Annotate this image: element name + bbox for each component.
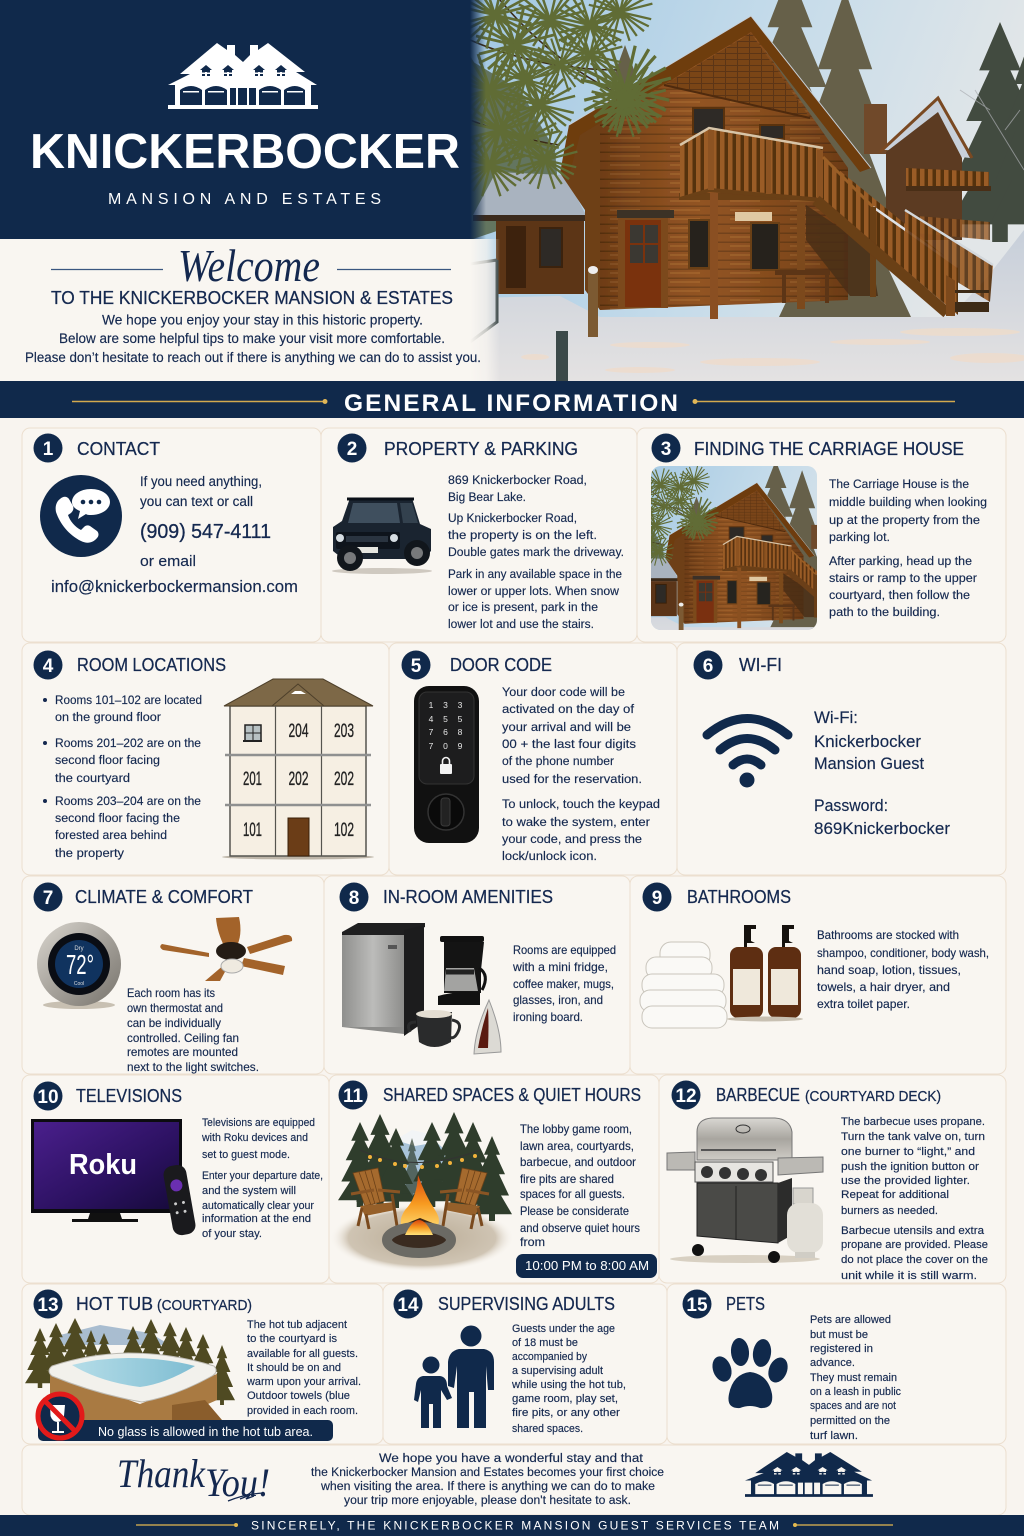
closing message [311, 1453, 664, 1507]
barbecue text: burners as needed. [841, 1205, 938, 1217]
panel: thank you [22, 1445, 1006, 1515]
welcome copy: Below are some helpful tips to make your visit more comfortable. [59, 331, 445, 346]
closing message: your trip more enjoyable, please don't hesitate to ask. [344, 1495, 631, 1507]
pets text: turf lawn. [810, 1430, 858, 1442]
hot tub text [246, 1319, 361, 1417]
icon: keypad lock: 9 [458, 741, 463, 751]
bathrooms text: hand soap, lotion, tissues, [817, 964, 961, 977]
icon: keypad lock: 3 [458, 700, 463, 710]
icon: thermostat: 72° [66, 949, 94, 980]
panel: bathrooms [630, 876, 1006, 1074]
heading: carriage house: FINDING THE CARRIAGE HOUSE [694, 439, 964, 459]
wi-fi credentials: Wi-Fi: [814, 709, 858, 727]
bathrooms text: Bathrooms are stocked with [817, 929, 959, 942]
icon: coffee maker [438, 936, 485, 1005]
supervising text: shared spaces. [512, 1423, 583, 1435]
header: brand panel [0, 0, 470, 239]
bathrooms text: extra toilet paper. [817, 998, 910, 1011]
panel: climate and comfort [22, 876, 324, 1074]
illustration: hot tub in forest [25, 1318, 235, 1420]
icon: thermostat: Cool [74, 981, 84, 987]
heading: amenities: IN-ROOM AMENITIES [383, 887, 553, 907]
carriage text: up at the property from the [829, 513, 980, 527]
contact text: info@knickerbockermansion.com [51, 578, 298, 596]
panel: room locations: 4 [43, 656, 54, 677]
climate text: own thermostat and [127, 1002, 223, 1015]
shared spaces text: fire pits are shared [520, 1173, 614, 1186]
closing message: when visiting the area. If there is anything we can do to make [320, 1481, 655, 1493]
icon: phone with chat bubble [40, 475, 122, 557]
wi-fi credentials: Password: [814, 797, 888, 815]
door code text: lock/unlock icon. [502, 849, 597, 863]
icon: keypad lock: 7 [429, 741, 434, 751]
panel: property and parking: 2 [347, 439, 357, 460]
hero photo: cabin in snow [451, 0, 1024, 381]
barbecue text: do not place the cover on the [841, 1254, 988, 1266]
room list [43, 693, 202, 860]
barbecue text: use the provided lighter. [841, 1175, 970, 1187]
thank you script [117, 1451, 270, 1505]
panel: pets [667, 1284, 1006, 1444]
property text: Big Bear Lake. [448, 490, 526, 504]
carriage text [829, 477, 987, 619]
heading: barbecue: BARBECUE [716, 1085, 800, 1105]
amenities text [512, 944, 616, 1024]
welcome copy: We hope you enjoy your stay in this historic property. [102, 312, 423, 328]
panel: wi-fi: 6 [703, 656, 713, 677]
pets text: advance. [810, 1357, 855, 1369]
barbecue text: The barbecue uses propane. [841, 1116, 985, 1128]
shared spaces text: and observe quiet hours [520, 1222, 640, 1235]
panel: contact: 1 [43, 439, 54, 460]
panel: barbecue: 12 [675, 1086, 697, 1107]
barbecue text: unit while it is still warm. [841, 1270, 977, 1282]
contact text: you can text or call [140, 494, 253, 509]
diagram: house with room numbers: 102 [334, 820, 354, 841]
door code text: To unlock, touch the keypad [502, 797, 660, 811]
wi-fi credentials: Knickerbocker [814, 733, 922, 751]
television text: of your stay. [202, 1228, 262, 1240]
property text: lower lot and use the stairs. [448, 617, 594, 631]
diagram: house with room numbers: 204 [288, 721, 309, 742]
carriage text: courtyard, then follow the [829, 588, 970, 602]
panel: door code [389, 643, 677, 875]
panel: property and parking [321, 428, 637, 642]
thank you script: You! [205, 1460, 270, 1505]
heading: pets: PETS [726, 1294, 765, 1314]
welcome script: Welcome [178, 240, 320, 291]
hot tub text: provided in each room. [247, 1405, 358, 1417]
supervising text: Guests under the age [512, 1323, 615, 1335]
panel: hot tub [22, 1284, 383, 1444]
door code text: Your door code will be [502, 685, 625, 699]
panel: hot tub: 13 [37, 1295, 59, 1316]
hot tub text: warm upon your arrival. [246, 1376, 361, 1388]
contact text [51, 474, 298, 596]
contact text: If you need anything, [140, 474, 262, 489]
welcome heading: TO THE KNICKERBOCKER MANSION & ESTATES [51, 288, 453, 308]
wi-fi credentials [814, 709, 951, 838]
room list: second floor facing [55, 753, 160, 767]
callout: quiet hours [516, 1254, 657, 1278]
television text: Televisions are equipped [202, 1117, 315, 1129]
supervising text [511, 1323, 626, 1435]
property text: Double gates mark the driveway. [448, 545, 624, 559]
carriage text: parking lot. [829, 530, 890, 544]
wi-fi credentials: 869Knickerbocker [814, 820, 951, 838]
door code text: your arrival and will be [502, 720, 631, 734]
icon: remote [162, 1164, 197, 1237]
door code text: used for the reservation. [502, 772, 642, 786]
heading: wi-fi: WI-FI [739, 655, 782, 675]
shared spaces text: The lobby game room, [520, 1123, 632, 1136]
closing message: the Knickerbocker Mansion and Estates becomes your first choice [311, 1467, 664, 1479]
welcome copy [25, 312, 481, 365]
heading: barbecue: (COURTYARD DECK) [805, 1088, 941, 1105]
icon: gas grill [667, 1118, 823, 1263]
icon: mini fridge [342, 923, 425, 1036]
room list: Rooms 101–102 are located [55, 693, 202, 707]
heading: rooms: ROOM LOCATIONS [77, 655, 226, 675]
callout: no glass: No glass is allowed in the hot tub area. [98, 1425, 313, 1439]
icon: adult and child [414, 1326, 494, 1428]
panel: finding the carriage house [637, 428, 1006, 642]
carriage text: After parking, head up the [829, 554, 972, 568]
callout: no glass [38, 1420, 333, 1441]
television text: automatically clear your [202, 1200, 314, 1212]
icon: propane tank [787, 1188, 823, 1258]
panel: contact [22, 428, 321, 642]
title: KNICKERBOCKER [30, 125, 460, 179]
supervising text: while using the hot tub, [511, 1379, 626, 1391]
bathrooms text: shampoo, conditioner, body wash, [817, 947, 989, 960]
property text: or ice is present, park in the [448, 600, 598, 614]
television text: and the system will [202, 1185, 296, 1197]
panel: shared spaces and quiet hours: 11 [343, 1086, 363, 1107]
supervising text: accompanied by [512, 1351, 587, 1363]
property text: Park in any available space in the [448, 567, 622, 581]
section band: general information [0, 381, 1024, 418]
amenities text: with a mini fridge, [512, 961, 608, 974]
pets text: permitted on the [810, 1415, 890, 1427]
icon: no glass sign [38, 1394, 82, 1438]
television text [201, 1117, 323, 1240]
icon: keypad lock: 1 [429, 700, 434, 710]
icon: keypad lock: 6 [443, 727, 448, 737]
photo: carriage house [651, 466, 817, 630]
property text: Up Knickerbocker Road, [448, 511, 577, 525]
icon: keypad lock: 7 [429, 727, 434, 737]
room list: on the ground floor [55, 710, 161, 724]
pets text: Pets are allowed [810, 1314, 891, 1326]
property text: 869 Knickerbocker Road, [448, 473, 587, 487]
climate text: remotes are mounted [127, 1046, 238, 1059]
heading: property: PROPERTY & PARKING [384, 439, 578, 459]
signature: SINCERELY, THE KNICKERBOCKER MANSION GUEST SERVICES TEAM [251, 1518, 779, 1532]
icon: keypad lock: 8 [458, 727, 463, 737]
television text: Enter your departure date, [202, 1170, 323, 1182]
supervising text: fire pits, or any other [512, 1407, 620, 1419]
hot tub text: to the courtyard is [247, 1333, 337, 1345]
climate text: can be individually [127, 1017, 221, 1030]
diagram: house with room numbers: 201 [243, 769, 262, 790]
carriage text: stairs or ramp to the upper [829, 571, 977, 585]
room list: the courtyard [55, 771, 130, 785]
door code text: your code, and press the [502, 832, 642, 846]
climate text [127, 987, 259, 1074]
door code text: activated on the day of [502, 702, 635, 716]
hot tub text: Outdoor towels (blue [247, 1390, 350, 1402]
heading: contact: CONTACT [77, 439, 160, 459]
heading: hot tub: HOT TUB [76, 1294, 153, 1314]
pets text [810, 1314, 901, 1442]
barbecue text [841, 1116, 988, 1282]
barbecue text: propane are provided. Please [841, 1239, 988, 1251]
panel: televisions [22, 1075, 329, 1283]
hot tub text: It should be on and [247, 1362, 341, 1374]
thank you script: Thank [117, 1451, 206, 1496]
panel: climate and comfort: 7 [43, 888, 53, 909]
icon: amber bottles [727, 925, 803, 1022]
panel: door code: 5 [411, 656, 422, 677]
amenities text: glasses, iron, and [513, 994, 603, 1007]
icon: wi-fi [707, 718, 788, 784]
shared spaces text: spaces for all guests. [520, 1188, 625, 1201]
heading: televisions: TELEVISIONS [76, 1086, 182, 1106]
panel: shared spaces and quiet hours [329, 1075, 659, 1283]
property text [448, 473, 624, 631]
icon: thermostat [37, 922, 121, 1009]
panel: finding the carriage house: 3 [661, 439, 671, 460]
carriage text: middle building when looking [829, 495, 987, 509]
television text: information at the end [202, 1213, 311, 1225]
icon: keypad lock [414, 686, 479, 843]
wi-fi credentials: Mansion Guest [814, 755, 924, 773]
footer band [0, 1515, 1024, 1536]
hot tub text: The hot tub adjacent [247, 1319, 348, 1331]
icon: ceiling fan [160, 917, 292, 981]
icon: keypad lock: 4 [429, 714, 434, 724]
television text: set to guest mode. [202, 1149, 290, 1161]
pets text: on a leash in public [810, 1386, 901, 1398]
logo: mansion [168, 43, 318, 109]
header: welcome panel [0, 239, 481, 381]
climate text: next to the light switches. [127, 1061, 259, 1074]
icon: keypad lock: 0 [443, 741, 448, 751]
icon: keypad lock: 5 [458, 714, 463, 724]
climate text: Each room has its [127, 987, 215, 1000]
panel: pets: 15 [686, 1295, 708, 1316]
room list: forested area behind [55, 828, 167, 842]
icon: towels [640, 942, 727, 1028]
illustration: campfire with chairs [330, 1112, 514, 1272]
heading: bathrooms: BATHROOMS [687, 887, 791, 907]
diagram: house with room numbers: 202 [288, 769, 308, 790]
diagram: house with room numbers: 101 [243, 820, 262, 841]
panel: barbecue [659, 1075, 1006, 1283]
pets text: spaces and are not [810, 1400, 896, 1412]
contact text: (909) 547-4111 [140, 521, 271, 543]
supervising text: a supervising adult [512, 1365, 603, 1377]
diagram: house with room numbers [222, 679, 374, 860]
panel: supervising adults [383, 1284, 667, 1444]
panel: bathrooms: 9 [652, 888, 662, 909]
heading: barbecue [716, 1085, 941, 1105]
callout: quiet hours: 10:00 PM to 8:00 AM [525, 1258, 649, 1273]
barbecue text: Repeat for additional [841, 1189, 949, 1201]
room list: the property [55, 846, 125, 860]
amenities text: ironing board. [513, 1011, 583, 1024]
pets text: They must remain [810, 1372, 897, 1384]
room list: Rooms 201–202 are on the [55, 736, 201, 750]
contact text: or email [140, 554, 196, 570]
heading: shared spaces: SHARED SPACES & QUIET HOURS [383, 1085, 641, 1105]
amenities text: coffee maker, mugs, [513, 978, 614, 991]
icon: paw print [709, 1337, 791, 1408]
door code text: to wake the system, enter [502, 815, 650, 829]
barbecue text: one burner to “light,” and [841, 1146, 975, 1158]
panel: room locations [22, 643, 389, 875]
subtitle: MANSION AND ESTATES [108, 191, 381, 208]
shared spaces text: Please be considerate [520, 1205, 629, 1218]
door code text: of the phone number [502, 754, 614, 768]
diagram: house with room numbers: 203 [334, 721, 354, 742]
carriage text: path to the building. [829, 605, 940, 619]
bathrooms text: towels, a hair dryer, and [817, 981, 950, 994]
pets text: registered in [810, 1343, 873, 1355]
carriage text: The Carriage House is the [829, 477, 969, 491]
closing message: We hope you have a wonderful stay and that [379, 1453, 644, 1465]
heading: supervising adults: SUPERVISING ADULTS [438, 1294, 615, 1314]
diagram: house with room numbers: 202 [334, 769, 354, 790]
door code text: 00 + the last four digits [502, 737, 636, 751]
television text: with Roku devices and [201, 1132, 308, 1144]
welcome copy: Please don’t hesitate to reach out if there is anything we can do to assist you. [25, 350, 481, 365]
hot tub text: available for all guests. [247, 1348, 358, 1360]
barbecue text: Barbecue utensils and extra [841, 1225, 985, 1237]
shared spaces text [520, 1123, 640, 1249]
climate text: controlled. Ceiling fan [127, 1032, 239, 1045]
panel: wi-fi [677, 643, 1006, 875]
room list: second floor facing the [55, 811, 180, 825]
heading: hot tub: (COURTYARD) [157, 1297, 252, 1314]
supervising text: game room, play set, [512, 1393, 618, 1405]
shared spaces text: lawn area, courtyards, [520, 1140, 634, 1153]
icon: black SUV [332, 498, 432, 574]
heading: hot tub [76, 1294, 252, 1314]
barbecue text: Turn the tank valve on, turn [841, 1131, 985, 1143]
panel: televisions: 10 [37, 1087, 59, 1108]
property text: lower or upper lots. When snow [448, 584, 619, 598]
door code text [502, 685, 660, 863]
icon: thermostat: Dry [74, 946, 84, 952]
icon: TV with Roku [31, 1119, 182, 1222]
amenities text: Rooms are equipped [513, 944, 616, 957]
logo: small mansion [745, 1452, 873, 1497]
heading: door code: DOOR CODE [450, 655, 552, 675]
band title: GENERAL INFORMATION [344, 390, 678, 417]
icon: TV with Roku: Roku [69, 1149, 137, 1181]
barbecue text: push the ignition button or [841, 1161, 979, 1173]
shared spaces text: barbecue, and outdoor [520, 1156, 636, 1169]
room list: Rooms 203–204 are on the [55, 794, 201, 808]
property text: the property is on the left. [448, 528, 597, 542]
panel: supervising adults: 14 [397, 1295, 419, 1316]
icon: iron [474, 1000, 501, 1054]
supervising text: of 18 must be [512, 1337, 578, 1349]
heading: climate: CLIMATE & COMFORT [75, 887, 253, 907]
panel: in-room amenities: 8 [349, 888, 359, 909]
icon: mug [408, 1010, 460, 1047]
panel: in-room amenities [324, 876, 630, 1074]
pets text: but must be [810, 1329, 868, 1341]
shared spaces text: from [520, 1236, 545, 1249]
icon: keypad lock: 3 [443, 700, 448, 710]
icon: keypad lock: 5 [443, 714, 448, 724]
bathrooms text [817, 929, 989, 1011]
